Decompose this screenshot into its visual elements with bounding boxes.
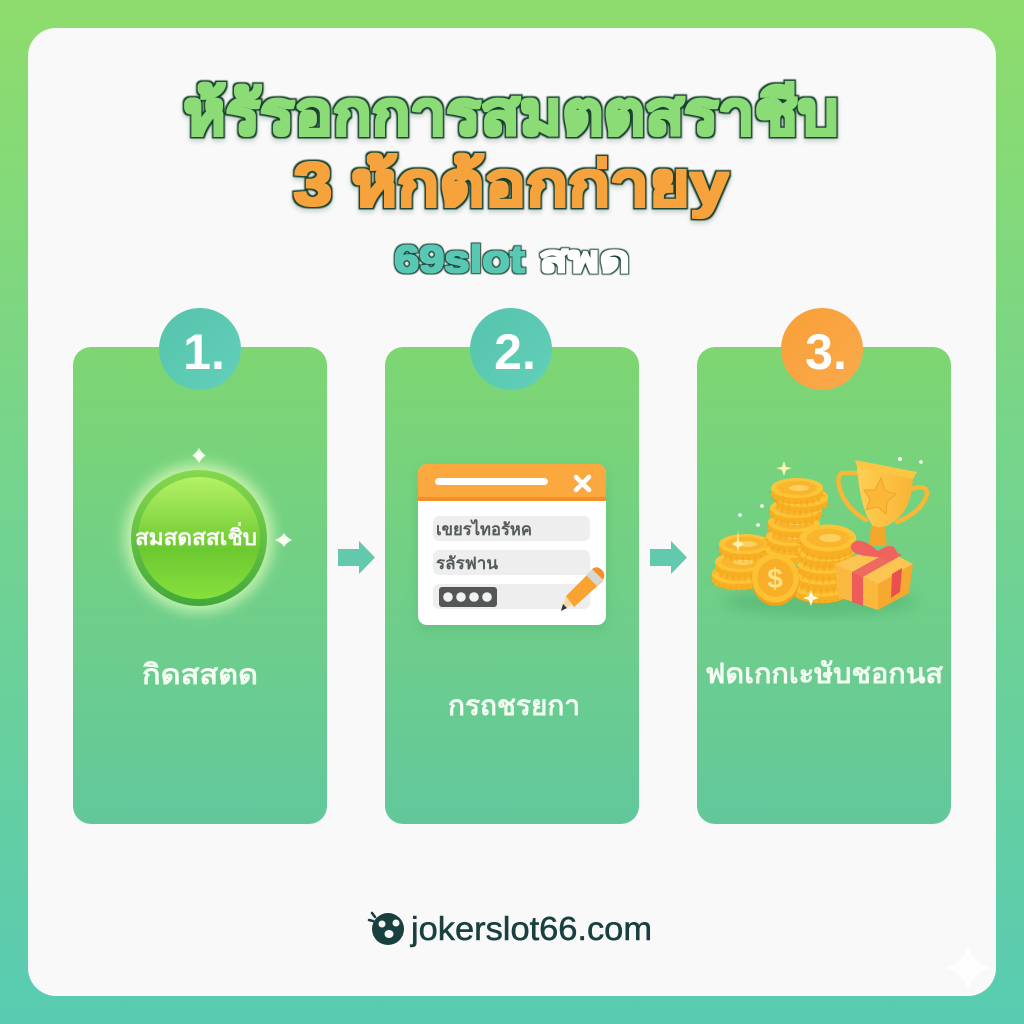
gift box [835,541,913,610]
field: username: เขยรไทอรัหค [436,519,532,539]
middle coin stack [764,478,828,564]
trophy [838,460,927,546]
icon: green signup button [125,464,273,612]
form window [418,464,606,629]
field: username [433,516,590,541]
title: ห้รัรอกการสมตตสราชีบ [184,80,839,147]
website text: jokerslot66.com [410,910,652,947]
step 1 label: กิดสสตด [142,659,258,690]
title: 3 ห้กต้อกก่ายy [294,151,729,218]
step 2 number badge: 2. [494,324,536,380]
field: password label: รลัรฟาน [436,554,498,573]
arrow 1 [338,541,375,574]
step 3 card [697,347,951,824]
sparkles [738,457,923,606]
front dollar coin [752,554,800,606]
step 2 number badge [470,308,552,390]
right coin stack [793,524,856,603]
panel: step 2 [385,308,639,824]
glint [732,530,744,552]
icon: sparkle top [192,448,206,463]
icon: green signup button: สมสดสสเชิ่บ [135,521,257,550]
icon: sparkle right [275,533,292,547]
step 2 label: กรถชรยกา [448,690,580,721]
icon: pencil [561,567,604,611]
step 1 number badge: 1. [183,324,225,380]
step 3 number badge: 3. [805,324,847,380]
icon: coins trophy and gift [712,457,927,616]
footer logo [369,910,652,947]
step 3 label: ฟดเกกเะษับชอกนส [705,658,944,689]
title [184,80,839,218]
step 3 number badge [781,308,863,390]
icon: joker face [369,913,404,945]
arrow 2 [650,541,687,574]
field: password label [433,550,590,575]
step 2 card [385,347,639,824]
subtitle [394,239,630,281]
step 1 card [73,347,327,824]
decorative sparkle corner [944,944,992,992]
left coin stack [712,534,771,590]
front dollar coin: $ [767,563,783,594]
subtitle: 69slot [394,239,525,281]
panel: step 3 [697,308,951,824]
icon: close [576,477,589,490]
subtitle: สพด [539,239,630,281]
field: masked password [433,584,590,609]
step 1 number badge [159,308,241,390]
panel: step 1 [73,308,327,824]
